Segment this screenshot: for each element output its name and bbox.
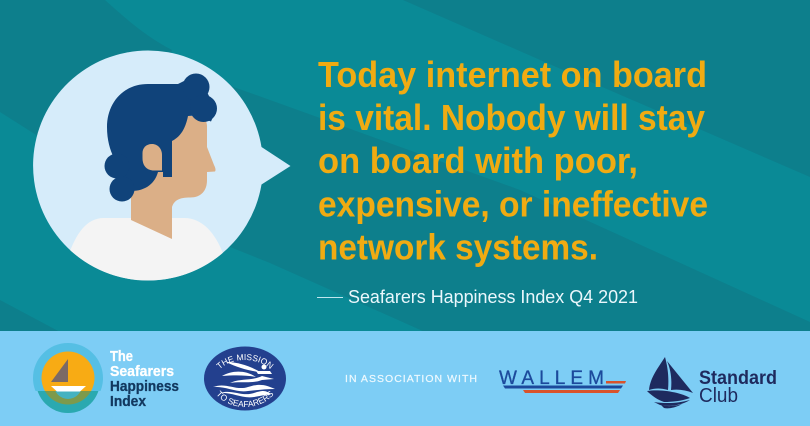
logo ring text	[216, 354, 274, 408]
quote heading: on board with poor,	[318, 140, 638, 181]
panel: footer band	[0, 331, 810, 426]
attribution line: Seafarers Happiness Index Q4 2021	[348, 287, 638, 307]
person: shirt	[70, 218, 223, 280]
person: hair	[104, 74, 217, 202]
logo wordmark: Standard	[699, 367, 777, 389]
icon: flying angel and waves	[213, 362, 275, 397]
logo: The Mission to Seafarers	[204, 346, 286, 410]
quote heading: Today internet on board	[318, 54, 707, 95]
logo wordmark: Happiness	[110, 378, 179, 395]
icon: sun and boat	[33, 343, 103, 413]
logo: Wallem: WALLEM	[499, 368, 604, 389]
logo wordmark: Seafarers	[110, 363, 174, 380]
logo: Wallem	[499, 368, 626, 393]
speech bubble with person portrait	[33, 50, 290, 290]
person: face and neck	[131, 116, 216, 239]
quote heading: expensive, or ineffective	[318, 184, 708, 224]
logo: Standard Club	[647, 357, 777, 408]
speech bubble	[33, 50, 290, 280]
logo: Standard Club: Club	[699, 385, 738, 407]
person: ear	[142, 144, 162, 170]
quote heading: is vital. Nobody will stay	[318, 97, 705, 138]
logo ring text: TO SEAFARERS	[218, 390, 274, 408]
logo ring text: THE MISSION	[216, 354, 274, 369]
quote heading: network systems.	[318, 226, 598, 268]
quote heading	[318, 54, 708, 268]
association label: IN ASSOCIATION WITH	[345, 373, 477, 385]
panel: teal background with wave bands	[0, 0, 810, 332]
logo wordmark: The	[110, 348, 133, 365]
icon: sailing ship	[647, 357, 693, 408]
logo wordmark	[110, 348, 179, 410]
logo: Seafarers Happiness Index	[33, 343, 179, 413]
logo wordmark: Index	[110, 393, 147, 410]
